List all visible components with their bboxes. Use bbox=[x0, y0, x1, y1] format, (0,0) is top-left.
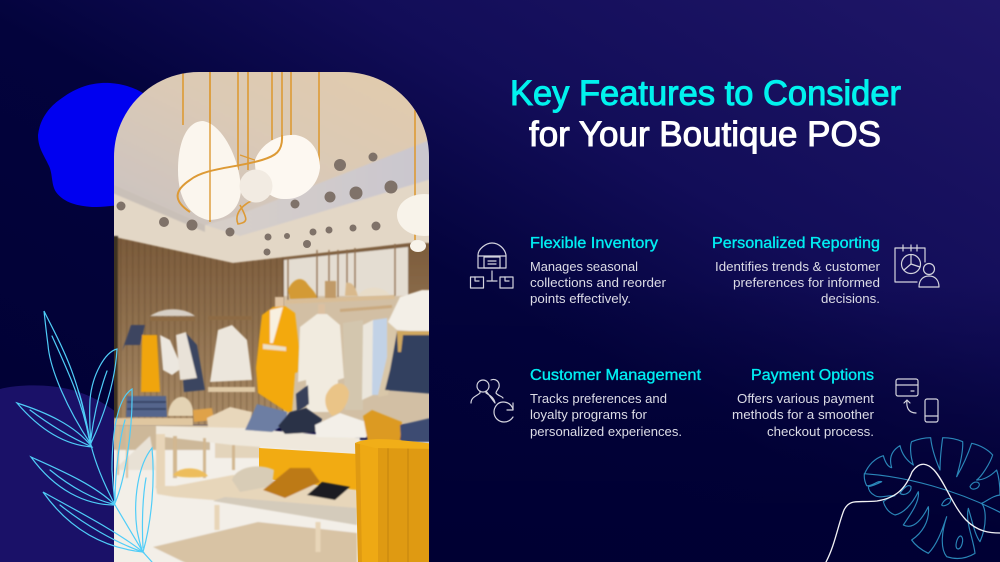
yellow pedestal bbox=[355, 439, 435, 562]
hanging lamps bbox=[178, 72, 451, 252]
floor bbox=[110, 425, 435, 562]
description: checkout process. bbox=[767, 424, 874, 439]
heading: Customer Management bbox=[530, 367, 702, 384]
table top and folded clothes bbox=[156, 404, 435, 488]
description: collections and reorder bbox=[530, 275, 667, 290]
description: methods for a smoother bbox=[732, 407, 875, 422]
ceiling bbox=[110, 68, 435, 268]
white curve bbox=[826, 464, 1000, 562]
description: Offers various payment bbox=[737, 391, 874, 406]
description: Tracks preferences and bbox=[530, 391, 667, 406]
title line 1: Key Features to Consider bbox=[510, 74, 901, 113]
description: Manages seasonal bbox=[530, 259, 638, 274]
icon: customers with refresh arrow bbox=[471, 379, 513, 422]
wood wall bbox=[110, 236, 435, 425]
title bbox=[510, 74, 901, 154]
left rack clothes bbox=[114, 325, 255, 426]
leaf branch bbox=[17, 311, 153, 562]
description: loyalty programs for bbox=[530, 407, 648, 422]
description bbox=[715, 259, 881, 306]
icon: card and phone bbox=[896, 379, 938, 422]
spotlights bbox=[116, 152, 398, 256]
description bbox=[732, 391, 875, 439]
feature: flexible inventory bbox=[470, 235, 667, 306]
yellow mannequin bbox=[256, 297, 299, 412]
monstera leaf bbox=[864, 438, 1000, 558]
lower shelf bbox=[156, 466, 357, 552]
blue blob bbox=[38, 83, 146, 207]
description: decisions. bbox=[821, 291, 880, 306]
description: points effectively. bbox=[530, 291, 631, 306]
feature: payment options bbox=[732, 367, 938, 439]
store photo bbox=[110, 68, 451, 562]
back shelves and rods bbox=[150, 244, 395, 321]
description bbox=[530, 391, 682, 439]
description bbox=[530, 259, 667, 306]
description: personalized experiences. bbox=[530, 424, 682, 439]
feature: customer management bbox=[471, 367, 702, 439]
heading: Personalized Reporting bbox=[712, 235, 880, 252]
description: preferences for informed bbox=[733, 275, 880, 290]
heading: Payment Options bbox=[751, 367, 874, 384]
yellow under table bbox=[259, 448, 358, 491]
description: Identifies trends & customer bbox=[715, 259, 881, 274]
icon: warehouse and boxes bbox=[470, 243, 513, 288]
title line 2: for Your Boutique POS bbox=[529, 115, 881, 154]
purple blob bbox=[0, 385, 116, 562]
feature: personalized reporting bbox=[712, 235, 939, 306]
icon: calendar chart and person bbox=[895, 245, 939, 287]
white dress and rack clothes bbox=[296, 290, 435, 416]
bottom shade bbox=[430, 0, 1000, 562]
heading: Flexible Inventory bbox=[530, 235, 658, 252]
